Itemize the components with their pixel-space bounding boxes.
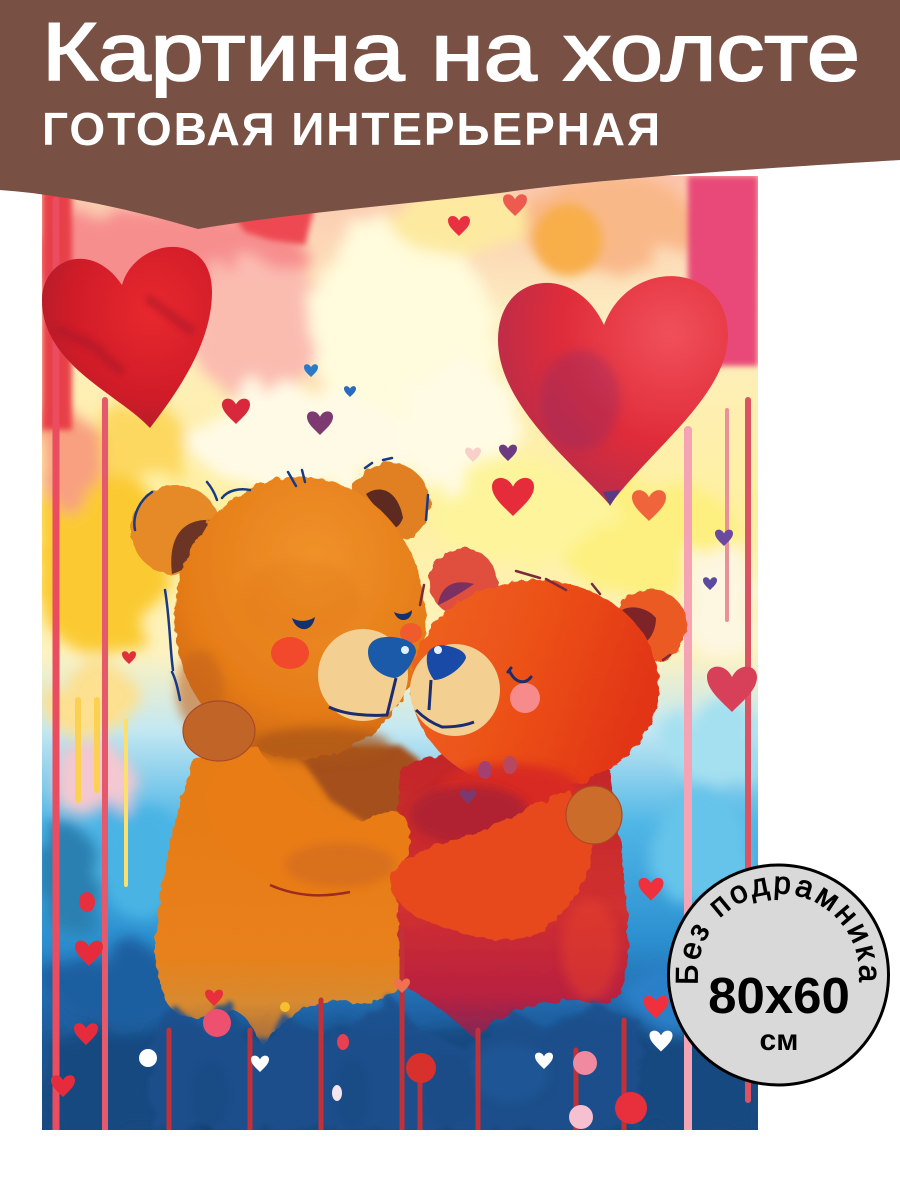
right bear eye — [508, 668, 531, 682]
large heart left — [42, 247, 212, 428]
left bear head — [175, 477, 425, 759]
right bear body highlight — [562, 900, 618, 1000]
large heart right — [498, 276, 728, 506]
painting: canvas with hugging bears — [30, 176, 770, 1140]
left bear ears — [131, 463, 430, 575]
left bear head shading — [169, 650, 396, 766]
badge: size without stretcher — [667, 864, 890, 1086]
lower blue paint over bear bodies — [150, 1000, 640, 1130]
right bear arm around left bear — [390, 790, 592, 940]
left bear nose and mouth — [329, 637, 416, 715]
red paint drips over bears — [169, 930, 624, 1130]
left arm contour — [270, 885, 350, 895]
right bear chest spots — [410, 756, 580, 845]
header banner — [0, 0, 900, 229]
right bear head — [411, 580, 659, 790]
paint drips — [56, 200, 748, 1130]
subtitle: ГОТОВАЯ ИНТЕРЬЕРНАЯ — [42, 103, 660, 155]
badge size: 80x60 — [708, 967, 850, 1024]
right bear nose and mouth — [416, 645, 474, 727]
left bear chest shadow — [293, 745, 420, 823]
left arm lower shading — [285, 843, 395, 887]
badge circle — [668, 865, 888, 1085]
badge unit: см — [760, 1024, 798, 1057]
bear hugging: right bear — [397, 548, 687, 1040]
left bear nose tip blush — [400, 623, 422, 643]
left bear arm around right bear — [246, 746, 412, 868]
bear arms — [183, 701, 622, 940]
left bear cheek — [271, 637, 309, 669]
small hearts — [51, 194, 757, 1129]
left bear muzzle — [318, 629, 408, 721]
right bear body — [397, 748, 628, 1040]
left bear body — [156, 739, 408, 1045]
paw on right bear's back — [566, 786, 622, 844]
title: Картина на холсте — [42, 7, 860, 98]
right bear cheek — [510, 683, 540, 713]
painting background wash — [30, 176, 770, 1140]
left bear fur ticks — [134, 458, 428, 700]
right bear fur ticks — [420, 571, 670, 660]
left bear eyes — [292, 610, 412, 629]
badge arc text: Без подрамника — [676, 876, 877, 983]
bear hugging: left bear — [131, 458, 430, 1045]
right bear ears — [429, 548, 687, 663]
paw on left bear's neck — [183, 701, 255, 761]
right bear muzzle — [410, 644, 500, 736]
